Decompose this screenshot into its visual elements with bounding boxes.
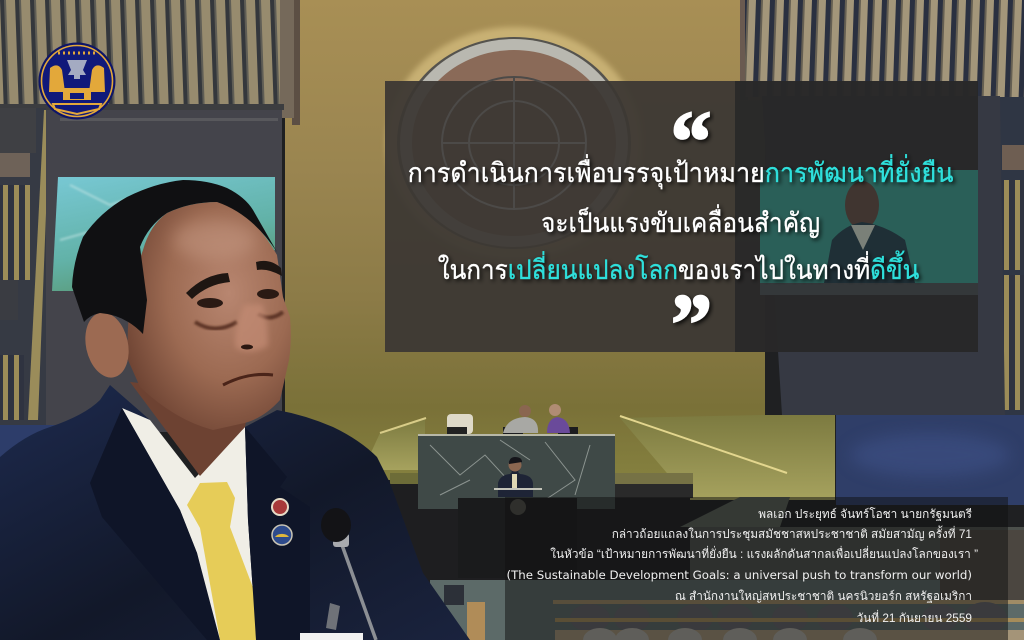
left dark screen panel — [0, 108, 282, 432]
quote text: ในการเปลี่ยนแปลงโลกของเราไปในทางที่ดีขึ้น — [438, 251, 919, 285]
caption text: ณ สำนักงานใหญ่สหประชาชาติ นครนิวยอร์ก สหรัฐอเมริกา — [675, 589, 972, 603]
portrait: lapel pins — [272, 499, 292, 545]
portrait: microphone — [321, 508, 376, 640]
caption text: ในหัวข้อ “เป้าหมายการพัฒนาที่ยั่งยืน : แรงผลักดันสากลเพื่อเปลี่ยนแปลงโลกของเรา ” — [550, 546, 978, 561]
portrait: face — [128, 202, 291, 430]
main portrait of speaker — [0, 180, 470, 640]
portrait: ear — [80, 308, 134, 382]
screen seen through box — [760, 170, 978, 295]
portrait: lanyard clip — [326, 603, 340, 630]
podium stage — [363, 414, 1024, 597]
portrait: necktie — [187, 482, 256, 640]
blue wall right — [0, 415, 1024, 505]
faint emblem through box — [442, 77, 586, 209]
UN emblem on wall — [386, 27, 642, 259]
quote text: การดำเนินการเพื่อบรรจุเป้าหมายการพัฒนาที่ยั่งยืน — [408, 154, 954, 189]
portrait: hair — [72, 180, 277, 334]
portrait: jacket — [0, 385, 470, 640]
left video screen — [52, 177, 275, 291]
panel: quote box — [385, 77, 978, 374]
caption text: พลเอก ประยุทธ์ จันทร์โอชา นายกรัฐมนตรี — [758, 507, 972, 521]
portrait: shirt collar — [122, 408, 256, 640]
portrait: neck — [130, 382, 250, 476]
caption text: กล่าวถ้อยแถลงในการประชุมสมัชชาสหประชาชาติ สมัยสามัญ ครั้งที่ 71 — [612, 525, 972, 541]
opening quotation mark: “ — [666, 94, 710, 191]
background: left ceiling slats — [0, 0, 294, 118]
caption text: (The Sustainable Development Goals: a universal push to transform our world) — [506, 568, 972, 582]
speaker at the podium — [494, 457, 542, 497]
officials at the rostrum — [503, 404, 570, 433]
delegate seating rows — [430, 530, 1024, 640]
portrait: forehead highlight — [173, 220, 257, 260]
closing quotation mark: ” — [666, 277, 710, 374]
background: right ceiling slats — [745, 0, 1024, 97]
portrait: lapels — [90, 408, 310, 640]
quote text — [408, 154, 954, 285]
caption text: วันที่ 21 กันยายน 2559 — [857, 610, 972, 625]
portrait: facial features — [186, 261, 283, 385]
panel: caption box — [505, 497, 1008, 640]
portrait: name badge — [300, 633, 363, 640]
right dark screen panel — [762, 96, 1024, 417]
government emblem — [38, 42, 116, 120]
quote text: จะเป็นแรงขับเคลื่อนสำคัญ — [541, 204, 820, 238]
caption text — [506, 507, 978, 625]
